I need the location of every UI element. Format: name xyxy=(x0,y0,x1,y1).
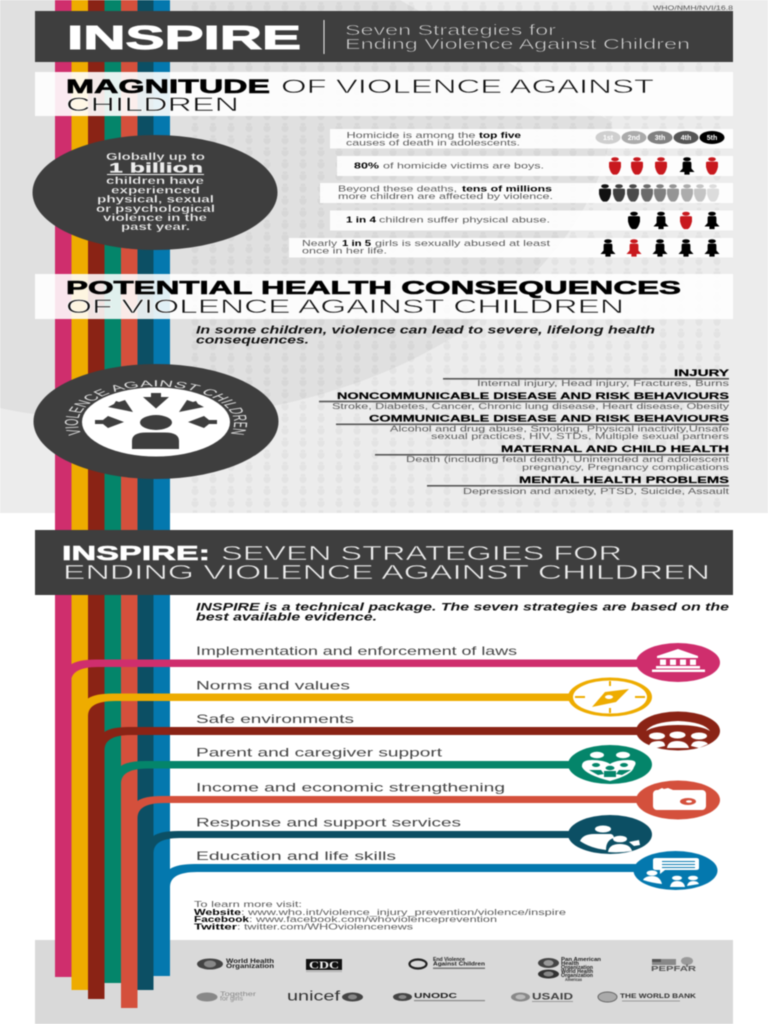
heading: potential health consequences: POTENTIAL HEALTH CONSEQUENCES xyxy=(66,277,681,298)
heading: seven strategies banner xyxy=(35,530,733,595)
logo: End Violence Against Children: End Violence xyxy=(433,957,465,963)
logo: CDC xyxy=(306,959,342,972)
stat row: tens of millions: tens of millions xyxy=(462,184,552,194)
icon: family in heart xyxy=(582,752,636,781)
consequence: mental health problems: MENTAL HEALTH PROBLEMS xyxy=(519,475,729,486)
strategy 4: parent and caregiver support: Parent and caregiver support xyxy=(196,746,443,760)
logo: Together for girls: Together xyxy=(220,992,256,998)
logo: World Health Organization: World Health xyxy=(226,958,274,965)
logo: UNODC xyxy=(393,991,485,1001)
intro text: health consequences xyxy=(196,324,655,346)
icon: violence against children badge xyxy=(32,363,280,480)
strategy 1: laws xyxy=(71,643,720,682)
callout: 1 billion children: 1 billion xyxy=(109,160,203,176)
title: INSPIRE: INSPIRE xyxy=(67,20,301,57)
footer logo panel background xyxy=(35,940,733,1024)
logo: Together for girls xyxy=(196,992,256,1002)
stat row: 80% boys: of homicide victims are boys. xyxy=(383,160,544,170)
consequence: communicable disease xyxy=(336,414,729,441)
strategy 6: response and support services xyxy=(154,815,652,854)
consequence: mental health problems xyxy=(427,475,730,496)
icon: wallet xyxy=(653,788,706,810)
consequence: communicable disease: sexual practices, HIV, STDs, Multiple sexual partners xyxy=(431,431,729,441)
consequence: mental health problems: Depression and anxiety, PTSD, Suicide, Assault xyxy=(463,486,730,496)
icon: ranking ovals: 4th xyxy=(681,135,691,142)
callout: 1 billion children xyxy=(32,135,278,250)
logo: Pan American Health Organization: Pan American xyxy=(561,957,601,963)
icon: nine fading figures xyxy=(599,184,719,202)
consequence: maternal and child health xyxy=(375,444,730,472)
background: white lower section xyxy=(0,513,768,940)
logo: The World Bank xyxy=(598,992,696,1002)
icon: ranking ovals: 5th xyxy=(707,135,717,142)
stat row: 1 in 5 girls: Nearly xyxy=(302,238,338,248)
learn more links: Website xyxy=(194,907,241,917)
intro text: health consequences: consequences. xyxy=(196,334,309,346)
subtitle: Seven Strategies for xyxy=(345,23,556,39)
callout: 1 billion children: violence in the xyxy=(103,212,207,224)
icon: four figures xyxy=(628,212,720,229)
consequence: maternal and child health: MATERNAL AND CHILD HEALTH xyxy=(501,444,729,455)
consequence: noncommunicable disease xyxy=(319,391,730,411)
icon: five girl figures xyxy=(600,239,720,257)
strategy 1: laws: Implementation and enforcement of laws xyxy=(196,644,517,658)
icon: violence against children badge: VIOLENCE AGAINST CHILDREN xyxy=(64,380,248,436)
learn more links xyxy=(194,899,566,932)
icon: supporting people xyxy=(580,826,640,852)
logo: Pan American Health Organization: Organization xyxy=(561,965,593,971)
stat row: tens of millions: Beyond these deaths, xyxy=(338,184,457,194)
logo: Pan American Health Organization xyxy=(538,957,601,982)
consequence: noncommunicable disease: Stroke, Diabetes, Cancer, Chronic lung disease, Heart disease, Obesity xyxy=(332,401,730,411)
heading: potential health consequences xyxy=(35,274,733,319)
learn more links: Twitter xyxy=(194,922,238,932)
strategy 2: norms and values: Norms and values xyxy=(196,678,350,692)
strategy 6: response and support services: Response and support services xyxy=(196,816,461,830)
stat row: 1 in 4 children xyxy=(330,210,733,230)
learn more links: : www.who.int/violence_injury_prevention/violence/inspire xyxy=(241,907,566,917)
heading: magnitude of violence: OF VIOLENCE AGAINST xyxy=(281,77,655,98)
consequence: noncommunicable disease: NONCOMMUNICABLE DISEASE AND RISK BEHAVIOURS xyxy=(337,391,729,402)
learn more links: : www.facebook.com/whoviolenceprevention xyxy=(249,914,497,924)
logo: PEPFAR xyxy=(651,957,696,973)
intro text: technical package xyxy=(196,602,729,624)
title banner xyxy=(35,11,733,62)
icon: three people under roof xyxy=(646,721,710,748)
icon: ranking ovals xyxy=(596,131,724,144)
subtitle xyxy=(345,23,690,53)
callout: 1 billion children: or psychological xyxy=(96,203,215,215)
seven coloured vertical stripes xyxy=(55,0,170,1008)
consequence: communicable disease: Alcohol and drug abuse, Smoking, Physical inactivity,Unsafe xyxy=(390,424,729,434)
callout: 1 billion children: Globally up to xyxy=(106,151,205,163)
icon: ranking ovals: 2nd xyxy=(628,135,640,142)
consequence: communicable disease: COMMUNICABLE DISEASE AND RISK BEHAVIOURS xyxy=(369,414,729,425)
icon: compass xyxy=(573,680,647,714)
intro text: technical package: INSPIRE is a technical package. The seven strategies are based on the xyxy=(196,602,729,614)
stat row: 80% boys: 80% xyxy=(354,160,380,170)
stat row: 1 in 4 children: 1 in 4 xyxy=(346,215,376,225)
strategy 3: safe environments xyxy=(104,712,720,750)
logo: World Health Organization: Organization xyxy=(226,963,274,970)
intro text: technical package: best available evidence. xyxy=(196,612,377,624)
logo: Pan American Health Organization: Health xyxy=(561,961,579,967)
stat row: top five causes xyxy=(330,129,733,148)
stat row: 1 in 4 children: children suffer physical abuse. xyxy=(379,215,550,225)
consequence: injury: Internal injury, Head injury, Fractures, Burns xyxy=(477,378,729,388)
logo: USAID xyxy=(511,992,574,1002)
heading: seven strategies banner: ENDING VIOLENCE AGAINST CHILDREN xyxy=(63,562,710,584)
icon: speech bubble and learners xyxy=(643,858,699,887)
logo: Together for girls: for girls xyxy=(220,996,243,1002)
strategy 5: income and economic strengthening xyxy=(138,780,720,820)
heading: magnitude of violence xyxy=(35,72,733,116)
logo: CDC: CDC xyxy=(309,960,339,972)
icon: government building xyxy=(652,649,705,672)
logo: Pan American Health Organization: Americas xyxy=(565,977,582,982)
stat row: 1 in 5 girls: girls is sexually abused at least xyxy=(375,238,551,248)
logo: unicef xyxy=(287,988,363,1004)
stat row: top five causes: Homicide is among the xyxy=(346,130,476,140)
strategy 7: education and life skills xyxy=(170,849,718,890)
document reference code: WHO/NMH/NVI/16.8 xyxy=(653,5,734,12)
stat row: 1 in 5 girls xyxy=(289,238,733,258)
strategy 4: parent and caregiver support xyxy=(121,745,652,784)
logo: UNODC: UNODC xyxy=(414,991,458,1000)
icon: ranking ovals: 3th xyxy=(655,135,665,142)
heading: seven strategies banner: INSPIRE: xyxy=(62,543,210,565)
background: top section xyxy=(0,0,768,513)
logo: The World Bank: THE WORLD BANK xyxy=(620,993,696,1000)
stat row: top five causes: causes of death in adolescents. xyxy=(346,137,520,147)
logo: Pan American Health Organization: Organization xyxy=(561,973,593,979)
heading: magnitude of violence: CHILDREN xyxy=(66,95,239,116)
consequence: injury: INJURY xyxy=(674,368,730,379)
subtitle: Ending Violence Against Children xyxy=(345,37,690,53)
stat row: 1 in 5 girls: 1 in 5 xyxy=(342,238,371,248)
stat row: tens of millions xyxy=(320,183,733,203)
learn more links: : twitter.com/WHOviolencenews xyxy=(237,922,413,932)
strategy 7: education and life skills: Education and life skills xyxy=(196,849,396,863)
callout: 1 billion children: experienced xyxy=(111,184,200,196)
strategy 2: norms and values xyxy=(88,678,652,716)
logo: unicef: unicef xyxy=(287,988,340,1004)
logo: PEPFAR: PEPFAR xyxy=(651,966,696,973)
strategy 3: safe environments: Safe environments xyxy=(196,712,354,726)
strategy 5: income and economic strengthening: Income and economic strengthening xyxy=(196,781,505,795)
logo: Pan American Health Organization: World Health xyxy=(561,969,593,975)
stat row: top five causes: top five xyxy=(479,130,521,140)
consequence: maternal and child health: Death (including fetal death), Unintended and adolescent xyxy=(406,454,730,464)
intro text: health consequences: In some children, violence can lead to severe, lifelong health xyxy=(196,324,655,336)
heading: potential health consequences: OF VIOLENCE AGAINST CHILDREN xyxy=(66,297,624,318)
logo: End Violence Against Children: Against Children xyxy=(433,962,486,968)
heading: magnitude of violence: MAGNITUDE xyxy=(66,77,270,98)
callout: 1 billion children: past year. xyxy=(121,221,190,233)
logo: World Health Organization xyxy=(197,958,274,970)
logo: End Violence Against Children xyxy=(410,957,486,969)
learn more links: To learn more visit: xyxy=(194,899,302,909)
heading: seven strategies banner: SEVEN STRATEGIES FOR xyxy=(221,543,622,565)
stat row: 1 in 5 girls: once in her life. xyxy=(302,246,387,256)
callout: 1 billion children: children have xyxy=(106,175,204,187)
consequence: maternal and child health: pregnancy, Pregnancy complications xyxy=(522,462,729,472)
callout: 1 billion children: physical, sexual xyxy=(97,194,214,206)
learn more links: Facebook xyxy=(194,914,249,924)
logo: USAID: USAID xyxy=(532,992,574,1002)
icon: ranking ovals: 1st xyxy=(603,135,614,142)
consequence: injury xyxy=(443,368,730,388)
stat row: 80% boys xyxy=(337,156,733,176)
icon: five figures xyxy=(609,157,718,175)
stat row: tens of millions: more children are affected by violence. xyxy=(338,191,553,201)
